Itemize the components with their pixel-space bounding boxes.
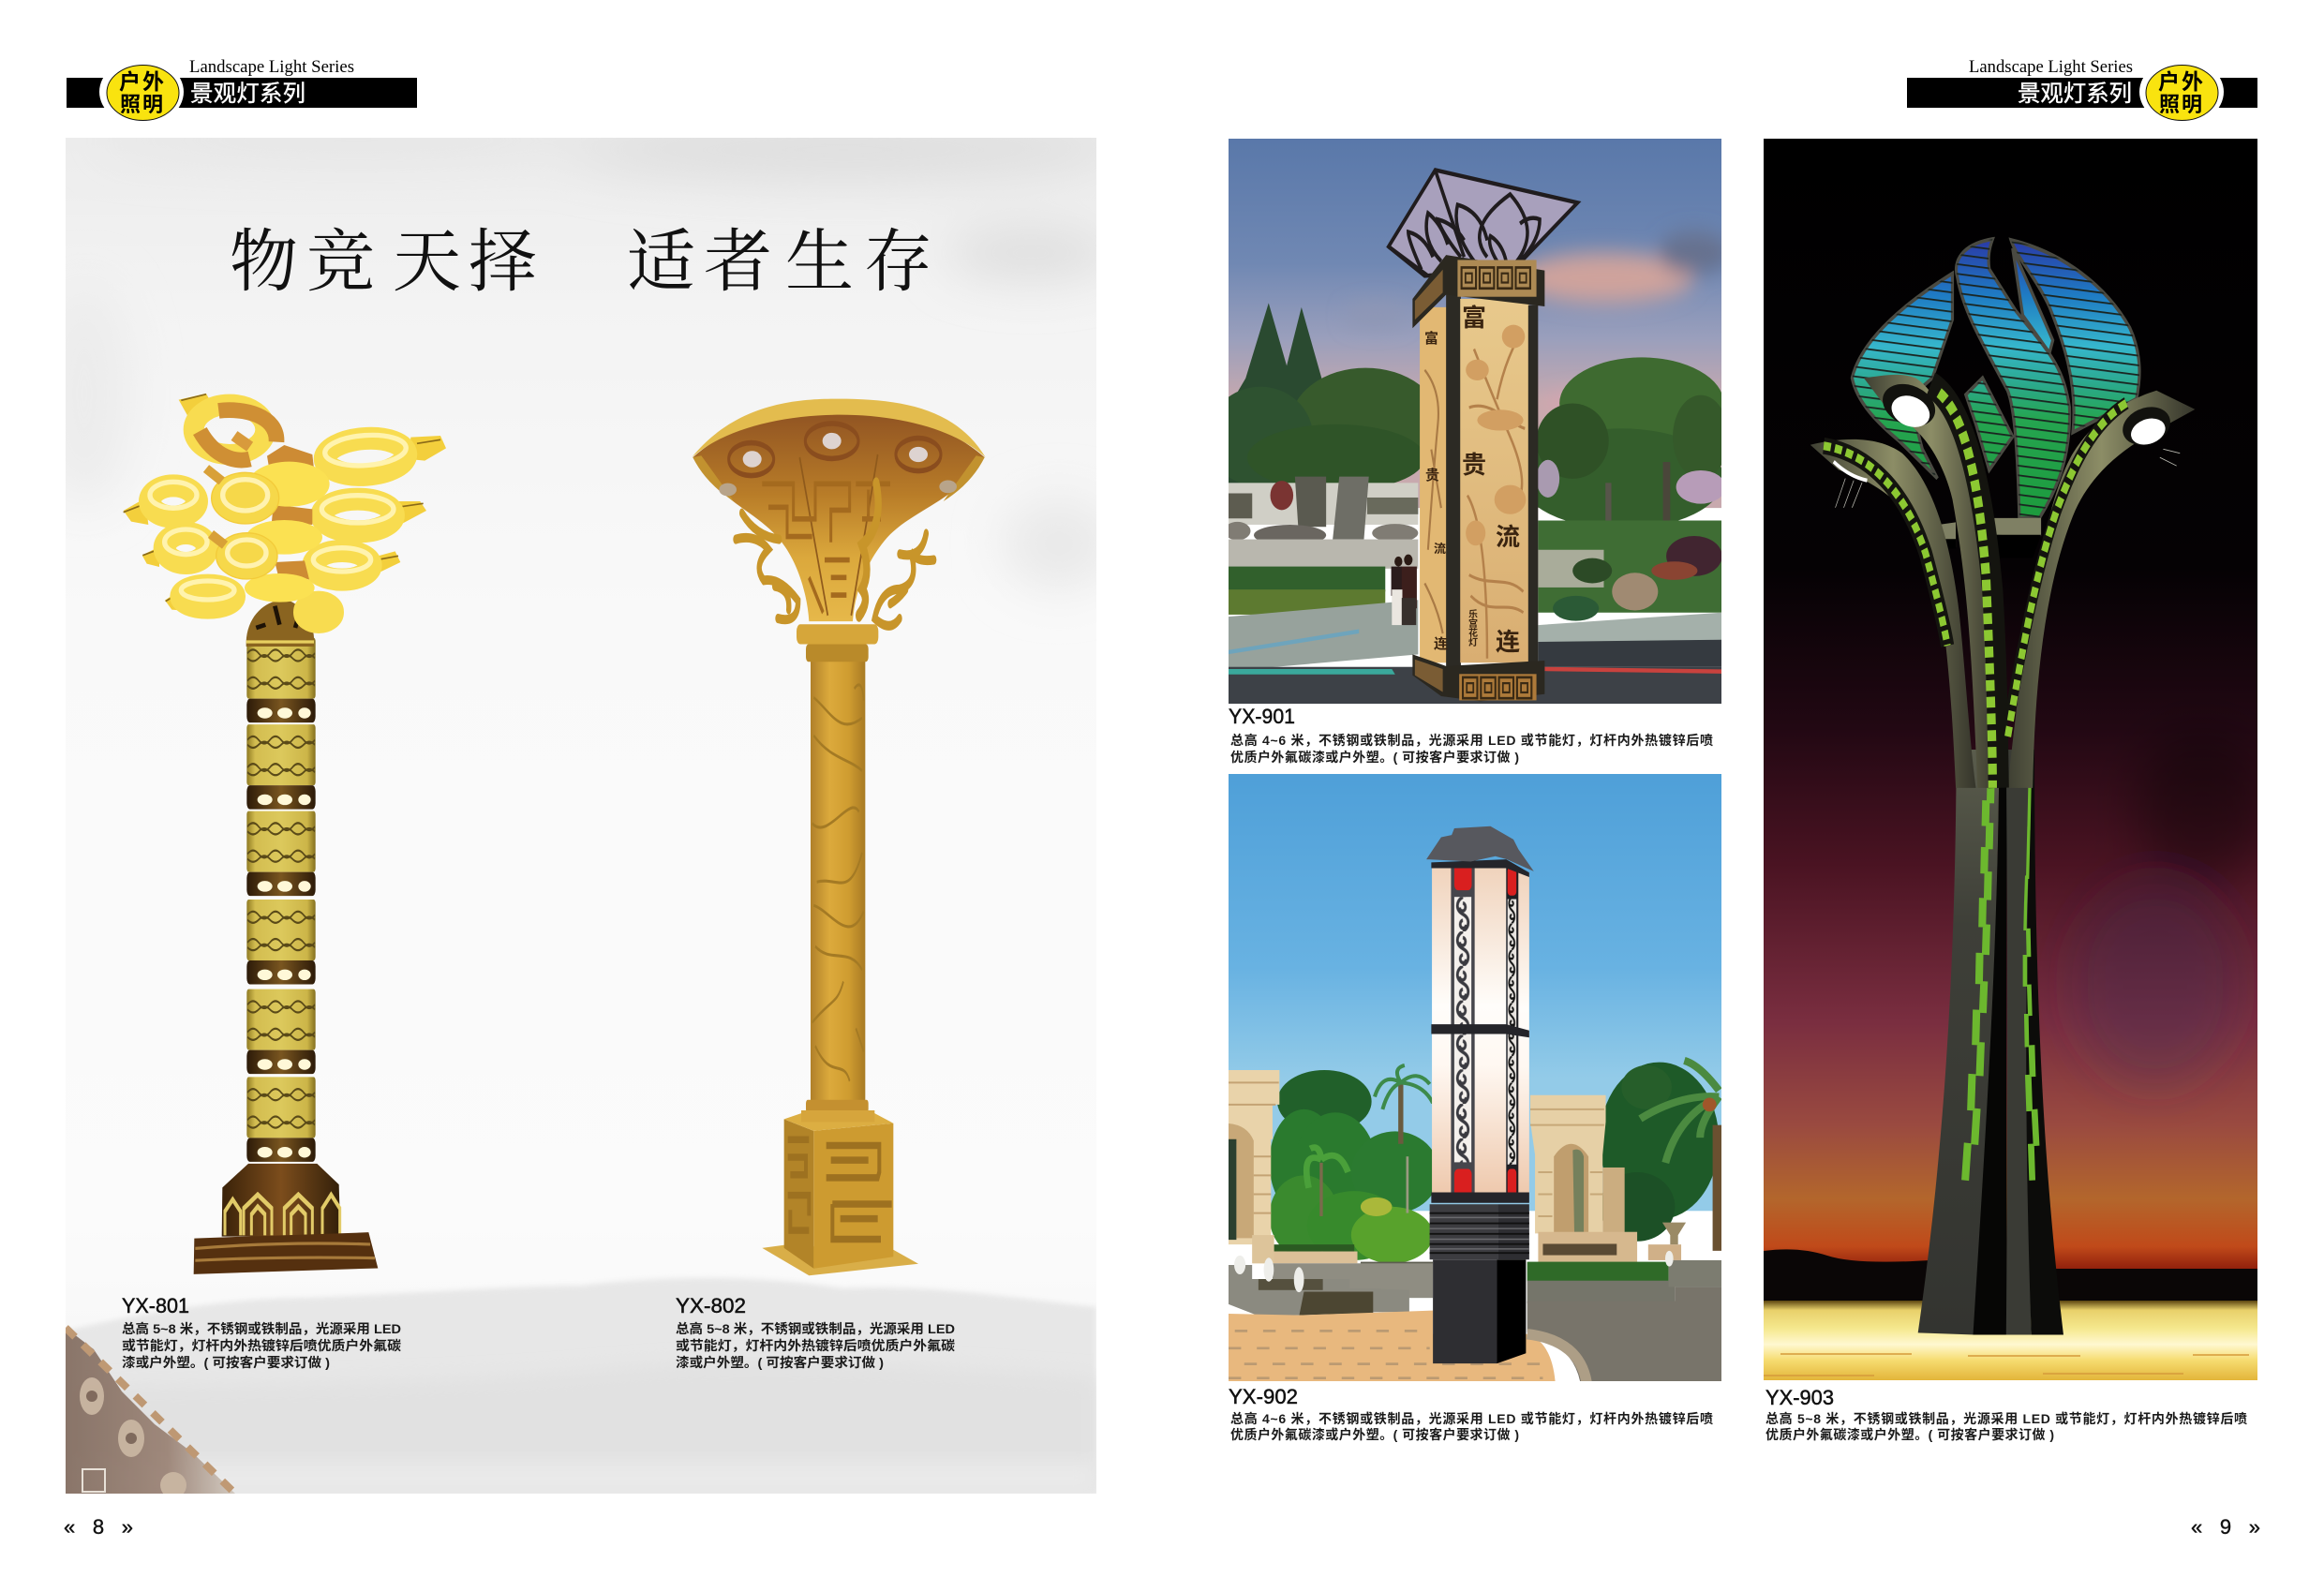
garden trees	[1208, 303, 1729, 533]
lit panels	[1432, 869, 1506, 1196]
blue sky	[1228, 768, 1723, 1211]
photo: YX-903 night lamp	[1764, 139, 2257, 1380]
product caption: YX-903: YX-903	[1765, 1386, 1834, 1409]
roof cap	[1426, 826, 1534, 871]
tropical trees	[1270, 1061, 1721, 1263]
front relief panel	[1460, 299, 1529, 662]
header: left series banner	[67, 58, 417, 126]
lotus canopy	[1389, 170, 1577, 275]
lamp inscriptions: YX-901: 流	[1496, 523, 1520, 551]
heading: calligraphy motto: 适者生存	[627, 206, 932, 305]
photo: YX-901 garden lamp	[1229, 139, 1721, 704]
cap and base	[1412, 255, 1544, 328]
English series name: Landscape Light Series	[1969, 58, 2133, 77]
lamp inscriptions: YX-901: 乐宫花灯	[1466, 609, 1477, 647]
header: right series banner	[1907, 58, 2257, 126]
arching arms	[1810, 375, 2195, 788]
product caption: YX-902: YX-902	[1229, 1385, 1298, 1408]
leaf panels	[1852, 239, 2139, 518]
glowing ring head	[124, 394, 446, 647]
product caption: YX-802	[676, 1294, 955, 1370]
road	[1273, 1263, 1721, 1384]
lamp inscriptions: YX-901: 富	[1424, 330, 1438, 347]
product caption: YX-802: 漆或户外塑。( 可按客户要求订做 )	[676, 1355, 884, 1370]
lamp: YX-802 golden dish lamp	[692, 399, 986, 1275]
page number 9: « 9 »	[2191, 1515, 2260, 1539]
lamp body	[1426, 826, 1534, 1363]
dusk sky	[1228, 131, 1723, 508]
left green steps	[1965, 750, 1992, 1181]
column collar	[797, 624, 878, 662]
product caption: YX-801: YX-801	[122, 1294, 189, 1317]
panel: ink-wash left page	[37, 120, 1125, 1498]
product caption: YX-901	[1229, 705, 1713, 765]
icon: yellow logo 户外照明: 照明	[120, 93, 163, 116]
flame head	[1810, 239, 2195, 788]
right green steps	[2025, 786, 2036, 1181]
right stone arch	[1530, 1095, 1625, 1233]
product caption: YX-802: 或节能灯，灯杆内外热镀锌后喷优质户外氟碳	[676, 1338, 955, 1353]
product caption: YX-801: 总高 5~8 米，不锈钢或铁制品，光源采用 LED	[122, 1321, 401, 1336]
lamp inscriptions: YX-901: 流	[1434, 542, 1446, 556]
rear rings	[150, 436, 408, 622]
logo halo	[99, 58, 184, 126]
product caption: YX-901: 总高 4~6 米，不锈钢或铁制品，光源采用 LED 或节能灯，灯杆内外热镀锌后喷	[1230, 733, 1713, 748]
dish canopy	[692, 399, 986, 621]
yellow discs	[245, 462, 330, 603]
low walls and hedges	[1252, 1223, 1721, 1303]
lamp: YX-801 golden ring lamp	[124, 394, 446, 1274]
photo: YX-902 resort lamp	[1229, 774, 1721, 1381]
lamp base	[194, 1164, 378, 1274]
icon: yellow logo 户外照明: 户外	[2158, 69, 2203, 94]
horizon clouds and band	[1764, 1249, 2257, 1304]
black banner bar	[67, 78, 417, 108]
product caption: YX-802: 总高 5~8 米，不锈钢或铁制品，光源采用 LED	[676, 1321, 955, 1336]
lamp inscriptions: YX-901: 贵	[1462, 451, 1486, 479]
Chinese series name: 景观灯系列	[190, 81, 305, 107]
dragon scroll ornaments	[736, 484, 934, 626]
product caption: YX-801: 漆或户外塑。( 可按客户要求订做 )	[122, 1355, 330, 1370]
sunset sky	[1764, 139, 2257, 1272]
product caption: YX-902: 总高 4~6 米，不锈钢或铁制品，光源采用 LED 或节能灯，灯杆内外热镀锌后喷	[1230, 1411, 1713, 1426]
product caption: YX-801: 或节能灯，灯杆内外热镀锌后喷优质户外氟碳	[122, 1338, 401, 1353]
pavement and lawn	[1228, 521, 1723, 705]
glowing ground	[1764, 1301, 2257, 1380]
product caption: YX-902: 优质户外氟碳漆或户外塑。( 可按客户要求订做 )	[1230, 1427, 1519, 1442]
bars	[1431, 859, 1529, 1203]
lamp body	[1412, 255, 1544, 701]
left stone arch	[1229, 1070, 1279, 1263]
fluted column	[801, 660, 874, 1123]
inner rings	[212, 472, 279, 579]
heading: calligraphy motto: 物竞天择	[230, 206, 537, 305]
corner post	[1446, 294, 1461, 667]
spot lights	[1834, 378, 2180, 508]
lamp inscriptions: YX-901: 富	[1462, 304, 1486, 332]
product caption: YX-901: 优质户外氟碳漆或户外塑。( 可按客户要求订做 )	[1230, 750, 1519, 765]
product caption: YX-903: 优质户外氟碳漆或户外塑。( 可按客户要求订做 )	[1765, 1427, 2054, 1442]
checker strip arms	[1824, 384, 2126, 788]
black banner bar	[1907, 78, 2257, 108]
product caption: YX-801	[122, 1294, 401, 1370]
product caption: YX-902	[1229, 1385, 1713, 1442]
Chinese series name: 景观灯系列	[2018, 81, 2132, 107]
lamp inscriptions: YX-901: 贵	[1425, 468, 1439, 484]
ribbed band	[1430, 1204, 1498, 1259]
plinth	[1433, 1259, 1497, 1363]
ornamental strips	[1451, 867, 1475, 1197]
wash mountains	[66, 1278, 1096, 1494]
support ring	[1941, 518, 2041, 547]
column segments	[246, 638, 316, 1162]
bottom plate	[762, 1245, 918, 1275]
logo halo	[2139, 58, 2224, 126]
product caption: YX-901: YX-901	[1229, 705, 1295, 728]
fountain	[1229, 1251, 1674, 1316]
palace roof corner	[66, 1328, 235, 1498]
lamp inscriptions: YX-901: 连	[1496, 628, 1520, 656]
icon: yellow logo 户外照明	[107, 66, 179, 120]
page number 8: « 8 »	[64, 1515, 133, 1539]
paved plaza	[1229, 1311, 1587, 1384]
couple walking	[1392, 555, 1417, 625]
red lenses	[1454, 862, 1516, 1198]
icon: yellow logo 户外照明: 照明	[2159, 93, 2202, 116]
product caption: YX-903: 总高 5~8 米，不锈钢或铁制品，光源采用 LED 或节能灯，灯杆内外热镀锌后喷	[1765, 1411, 2247, 1426]
ink wash background	[66, 138, 1096, 1494]
lamp inscriptions: YX-901	[1424, 304, 1520, 656]
icon: yellow logo 户外照明	[2146, 66, 2218, 120]
orange top ring	[194, 405, 276, 460]
orange connectors	[267, 445, 314, 579]
resort scene	[1229, 1061, 1721, 1384]
product caption: YX-903	[1765, 1386, 2247, 1442]
wall and stones	[1224, 477, 1418, 545]
side face	[1420, 307, 1447, 662]
English series name: Landscape Light Series	[189, 58, 354, 77]
lamp inscriptions: YX-901: 连	[1434, 635, 1448, 652]
square base	[784, 1113, 893, 1269]
leaf slats	[1852, 239, 2139, 518]
dome	[246, 602, 314, 647]
ring tips	[124, 394, 446, 611]
trunk	[1918, 750, 2063, 1335]
icon: yellow logo 户外照明: 户外	[119, 69, 164, 94]
product caption: YX-802: YX-802	[676, 1294, 746, 1317]
